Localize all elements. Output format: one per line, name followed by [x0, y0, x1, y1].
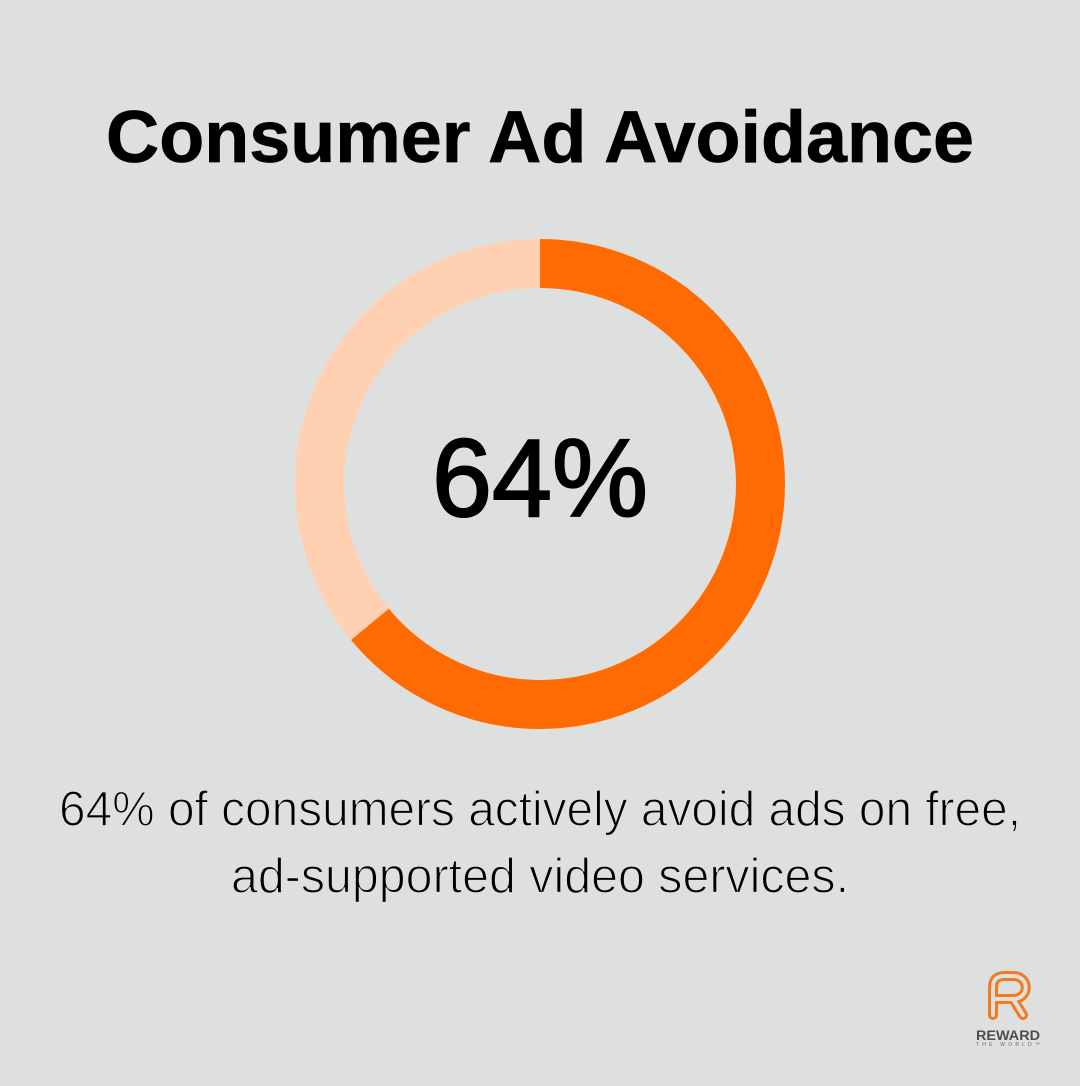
logo wordmark: REWARD — [976, 1028, 1040, 1043]
donut remainder track — [320, 264, 760, 704]
center value: 64% — [432, 417, 648, 540]
logo tagline: THE WORLD™ — [976, 1042, 1040, 1048]
title: Consumer Ad Avoidance — [106, 97, 974, 178]
logo: Reward the World — [976, 976, 1040, 1048]
donut value arc — [320, 264, 760, 704]
icon: R mark — [993, 976, 1026, 1015]
description text: 64% of consumers actively avoid ads on free, — [59, 782, 1021, 836]
description text — [59, 782, 1021, 904]
description text: ad-supported video services. — [231, 850, 849, 904]
donut chart: 64% — [320, 264, 760, 704]
